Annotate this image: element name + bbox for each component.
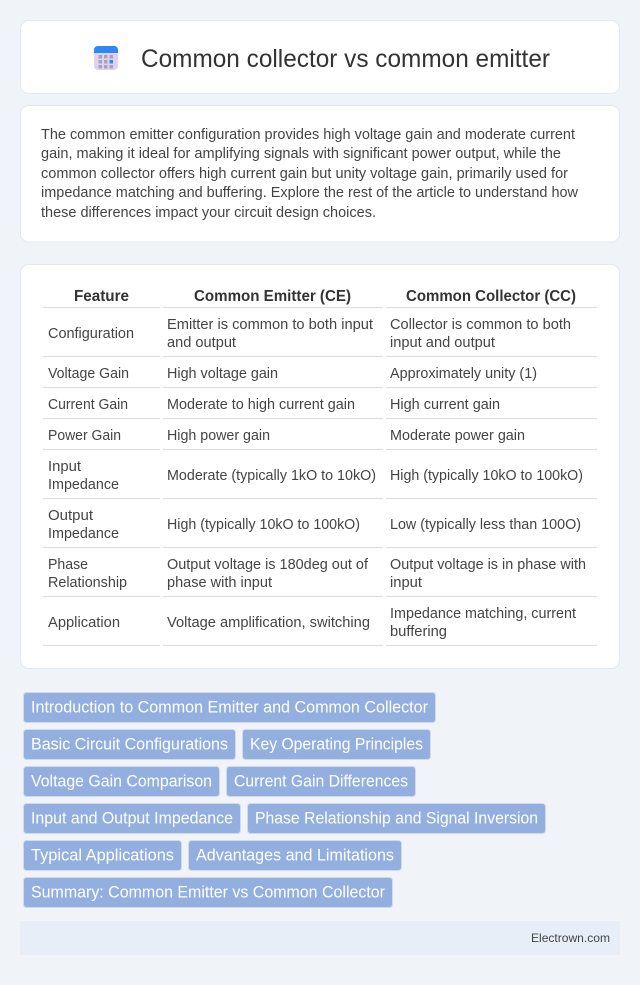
table row: phase relationship: Relationship <box>48 575 127 591</box>
table header: Feature <box>74 288 129 305</box>
table header: Common Collector (CC) <box>406 288 576 305</box>
tag: key operating principles: Key Operating Principles <box>250 736 423 754</box>
table row: output impedance: Low (typically less than 100O) <box>390 517 581 533</box>
table row: power gain <box>48 428 525 444</box>
table row: configuration: input and output <box>390 335 495 351</box>
tag: typical applications <box>24 840 182 870</box>
table row: configuration: and output <box>167 335 236 351</box>
footer <box>20 921 620 955</box>
table row: input impedance: Impedance <box>48 477 119 493</box>
table row: current gain: High current gain <box>390 397 500 413</box>
text block: introduction paragraph: The common emitter configuration provides high voltage gain and moderate current <box>41 126 576 143</box>
table row: input impedance <box>48 459 583 493</box>
table row: voltage gain: Voltage Gain <box>48 366 129 382</box>
table row: application: Application <box>48 615 120 631</box>
tag: current gain differences <box>226 766 416 796</box>
tag: input and output impedance: Input and Output Impedance <box>31 810 233 828</box>
topic tags <box>24 692 546 908</box>
text block: introduction paragraph: these differences impact your circuit design choices. <box>41 204 376 221</box>
table row: output impedance: High (typically 10kO to 100kO) <box>167 517 360 533</box>
footer: Electrown.com <box>531 931 610 945</box>
table row: output impedance: Impedance <box>48 526 119 542</box>
tag: key operating principles <box>242 730 430 760</box>
tag: phase relationship: Phase Relationship and Signal Inversion <box>255 810 538 828</box>
table row: application <box>48 606 576 640</box>
table row: input impedance: Moderate (typically 1kO to 10kO) <box>167 468 376 484</box>
tag: voltage gain comparison <box>24 766 220 796</box>
table row: output impedance: Output <box>48 508 93 524</box>
table row: power gain: Power Gain <box>48 428 121 444</box>
table row: input impedance: High (typically 10kO to 100kO) <box>390 468 583 484</box>
tag: typical applications: Typical Applications <box>31 846 174 864</box>
table row: current gain: Current Gain <box>48 397 128 413</box>
tag: advantages and limitations: Advantages and Limitations <box>196 846 394 864</box>
text block: introduction paragraph: gain, making it ideal for amplifying signals with significant power output, while the <box>41 145 561 162</box>
table row: power gain: High power gain <box>167 428 270 444</box>
table row: voltage gain <box>48 366 537 382</box>
panel: introduction <box>20 106 620 242</box>
table row: phase relationship: Output voltage is 180deg out of <box>167 557 369 573</box>
table row: current gain: Moderate to high current gain <box>167 397 355 413</box>
tag: summary: Summary: Common Emitter vs Common Collector <box>31 884 385 902</box>
table row: voltage gain: High voltage gain <box>167 366 278 382</box>
table row: phase relationship <box>48 557 586 591</box>
tag: summary <box>24 878 392 908</box>
tag: basic circuit configurations <box>24 730 236 760</box>
table row: current gain <box>48 397 500 413</box>
table row: configuration: Configuration <box>48 326 134 342</box>
table row: configuration <box>48 317 571 351</box>
table row: input impedance: Input <box>48 459 81 475</box>
table row: voltage gain: Approximately unity (1) <box>390 366 537 382</box>
tag: phase relationship <box>248 804 546 834</box>
tag: input and output impedance <box>24 804 240 834</box>
table row: application: Impedance matching, current <box>390 606 576 622</box>
table row: power gain: Moderate power gain <box>390 428 525 444</box>
panel: title card <box>20 20 620 94</box>
table row: phase relationship: Phase <box>48 557 88 573</box>
tag: basic circuit configurations: Basic Circuit Configurations <box>31 736 228 754</box>
table row: phase relationship: input <box>390 575 422 591</box>
tag: introduction: Introduction to Common Emitter and Common Collector <box>31 698 428 716</box>
table row: configuration: Emitter is common to both input <box>167 317 373 333</box>
tag: current gain differences: Current Gain Differences <box>234 772 408 790</box>
table row: application: Voltage amplification, switching <box>167 615 370 631</box>
table row: phase relationship: Output voltage is in phase with <box>390 557 586 573</box>
tag: introduction <box>24 692 436 722</box>
table row: output impedance <box>48 508 581 542</box>
panel: comparison table <box>20 264 620 668</box>
icon: calendar grid <box>94 46 118 70</box>
table row: configuration: Collector is common to both <box>390 317 571 333</box>
tag: voltage gain comparison: Voltage Gain Comparison <box>31 772 212 790</box>
tag: advantages and limitations <box>188 840 402 870</box>
table header: Common Emitter (CE) <box>194 288 351 305</box>
text block: introduction paragraph: common collector offers high current gain but unity voltage gain, primarily used for <box>41 165 568 182</box>
text block: introduction paragraph: impedance matching and buffering. Explore the rest of the article to understand how <box>41 184 578 201</box>
title: Common collector vs common emitter <box>141 45 550 73</box>
table row: phase relationship: phase with input <box>167 575 272 591</box>
table header <box>74 288 576 305</box>
table row: application: buffering <box>390 624 447 640</box>
text block: introduction paragraph <box>41 126 578 221</box>
